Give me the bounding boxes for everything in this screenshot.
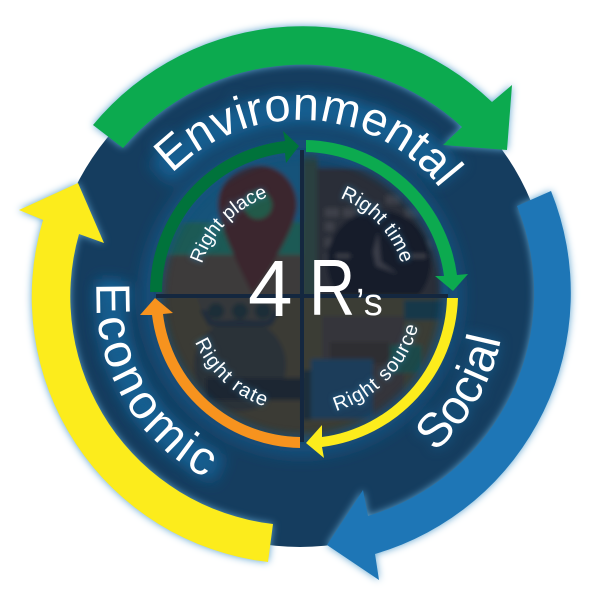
quadrant: right source barrel <box>304 294 447 442</box>
lighter glow bands behind outer labels <box>111 111 454 470</box>
quadrant: right rate crown and money bag <box>156 298 300 437</box>
quadrant crosshair lines <box>150 150 456 446</box>
arrow: right rate orange <box>140 298 300 448</box>
arrow: right source yellow <box>306 298 458 458</box>
label: Economic: Economic <box>92 283 214 475</box>
dark blue central disc <box>50 47 550 547</box>
arrow: right time green <box>306 140 468 291</box>
blue fade along the inner arrows <box>156 150 448 442</box>
arrow: economic yellow outer <box>19 183 273 562</box>
arrow: social blue outer <box>327 191 571 580</box>
arrow: right place dark green <box>150 131 299 292</box>
label: Right time: Right time <box>340 184 413 264</box>
quadrant: right place map with pin <box>156 155 300 294</box>
center title: 4 R's: 4 <box>248 244 292 333</box>
panel: blurred quadrant pictures <box>156 150 448 442</box>
quadrant: right time calendar and clock <box>304 150 442 298</box>
center title: 4 R's: R <box>309 243 355 333</box>
label: Social: Social <box>414 331 502 450</box>
arrow: environmental green outer <box>93 26 512 150</box>
label: Right rate: Right rate <box>194 335 270 408</box>
center title: 4 R's <box>248 243 383 333</box>
label: Right source: Right source <box>331 322 420 411</box>
label: Environmental: Environmental <box>152 92 464 187</box>
center title: 4 R's: ’s <box>356 282 383 324</box>
label: Right place: Right place <box>188 186 268 264</box>
